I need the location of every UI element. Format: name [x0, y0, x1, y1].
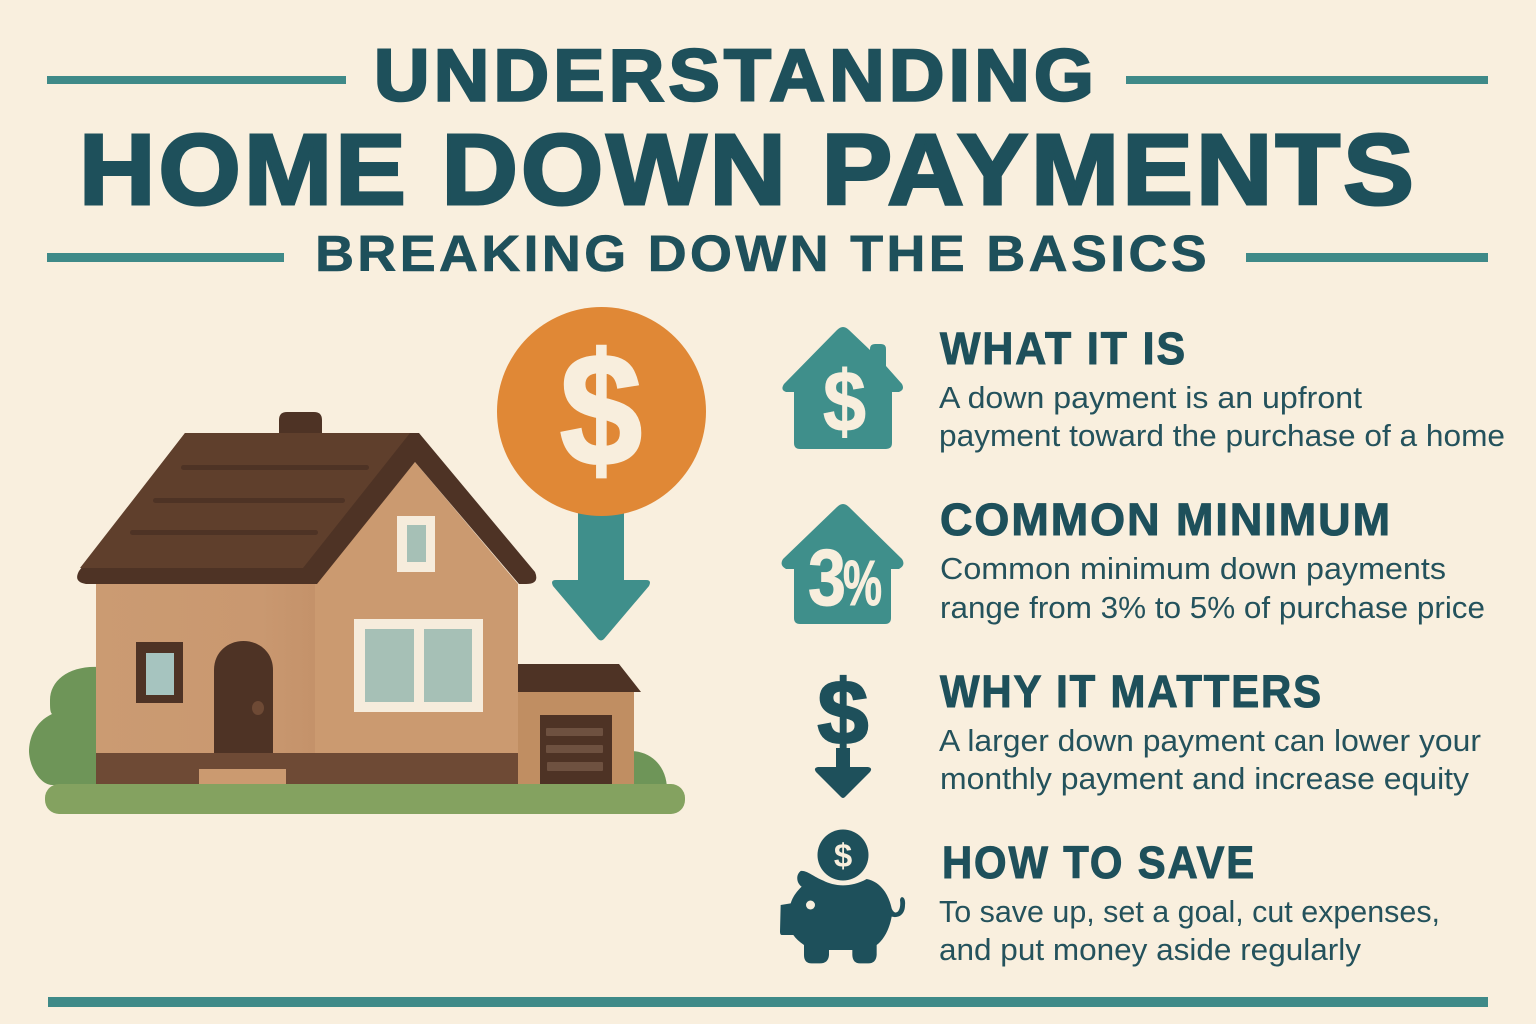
step	[199, 769, 286, 785]
title line: home down payments: HOME DOWN PAYMENTS	[79, 114, 1417, 226]
bushes	[29, 667, 667, 790]
body text	[939, 894, 1440, 967]
attic window	[397, 516, 435, 572]
section: what it is	[782, 323, 1505, 453]
section: how to save	[780, 830, 1440, 967]
icon: house with dollar: $	[823, 354, 866, 450]
ground	[45, 784, 685, 814]
body text: range from 3% to 5% of purchase price	[940, 590, 1485, 625]
title line: understanding: UNDERSTANDING	[374, 36, 1098, 116]
icon: house with dollar	[782, 327, 903, 450]
section: common minimum	[782, 494, 1485, 625]
large window	[354, 619, 483, 712]
title block	[47, 36, 1488, 282]
icon: house with 3 percent: %	[843, 547, 882, 619]
body text	[939, 380, 1505, 453]
icon: piggy bank with coin	[780, 830, 905, 963]
body text: monthly payment and increase equity	[940, 761, 1470, 796]
small window	[136, 642, 183, 703]
icon: piggy bank with coin: $	[834, 837, 852, 874]
garage	[518, 664, 641, 785]
heading: WHY IT MATTERS	[940, 666, 1323, 717]
icon: house with 3 percent	[782, 504, 903, 624]
coin with dollar sign	[497, 307, 706, 516]
heading: HOW TO SAVE	[942, 837, 1256, 888]
house illustration	[29, 412, 685, 814]
body text	[940, 551, 1485, 625]
body text	[939, 723, 1481, 796]
base	[96, 753, 518, 785]
arrow: down into house	[552, 510, 650, 640]
section: why it matters	[815, 662, 1481, 798]
heading: WHAT IT IS	[940, 323, 1187, 374]
roof	[77, 433, 536, 584]
coin with dollar sign: $	[560, 320, 642, 499]
door	[214, 641, 273, 753]
heading: COMMON MINIMUM	[940, 494, 1392, 545]
body text: and put money aside regularly	[939, 932, 1362, 967]
body text: payment toward the purchase of a home	[939, 418, 1505, 453]
subtitle: BREAKING DOWN THE BASICS	[315, 225, 1210, 282]
icon: house with 3 percent: 3	[808, 533, 846, 622]
icon: dollar with down arrow: $	[817, 662, 869, 764]
main walls	[96, 462, 518, 753]
body text: To save up, set a goal, cut expenses,	[939, 894, 1440, 929]
bottom rule	[48, 997, 1488, 1007]
body text: Common minimum down payments	[940, 551, 1446, 586]
body text: A down payment is an upfront	[939, 380, 1362, 415]
body text: A larger down payment can lower your	[939, 723, 1481, 758]
chimney	[279, 412, 322, 433]
icon: dollar with down arrow	[815, 662, 871, 798]
